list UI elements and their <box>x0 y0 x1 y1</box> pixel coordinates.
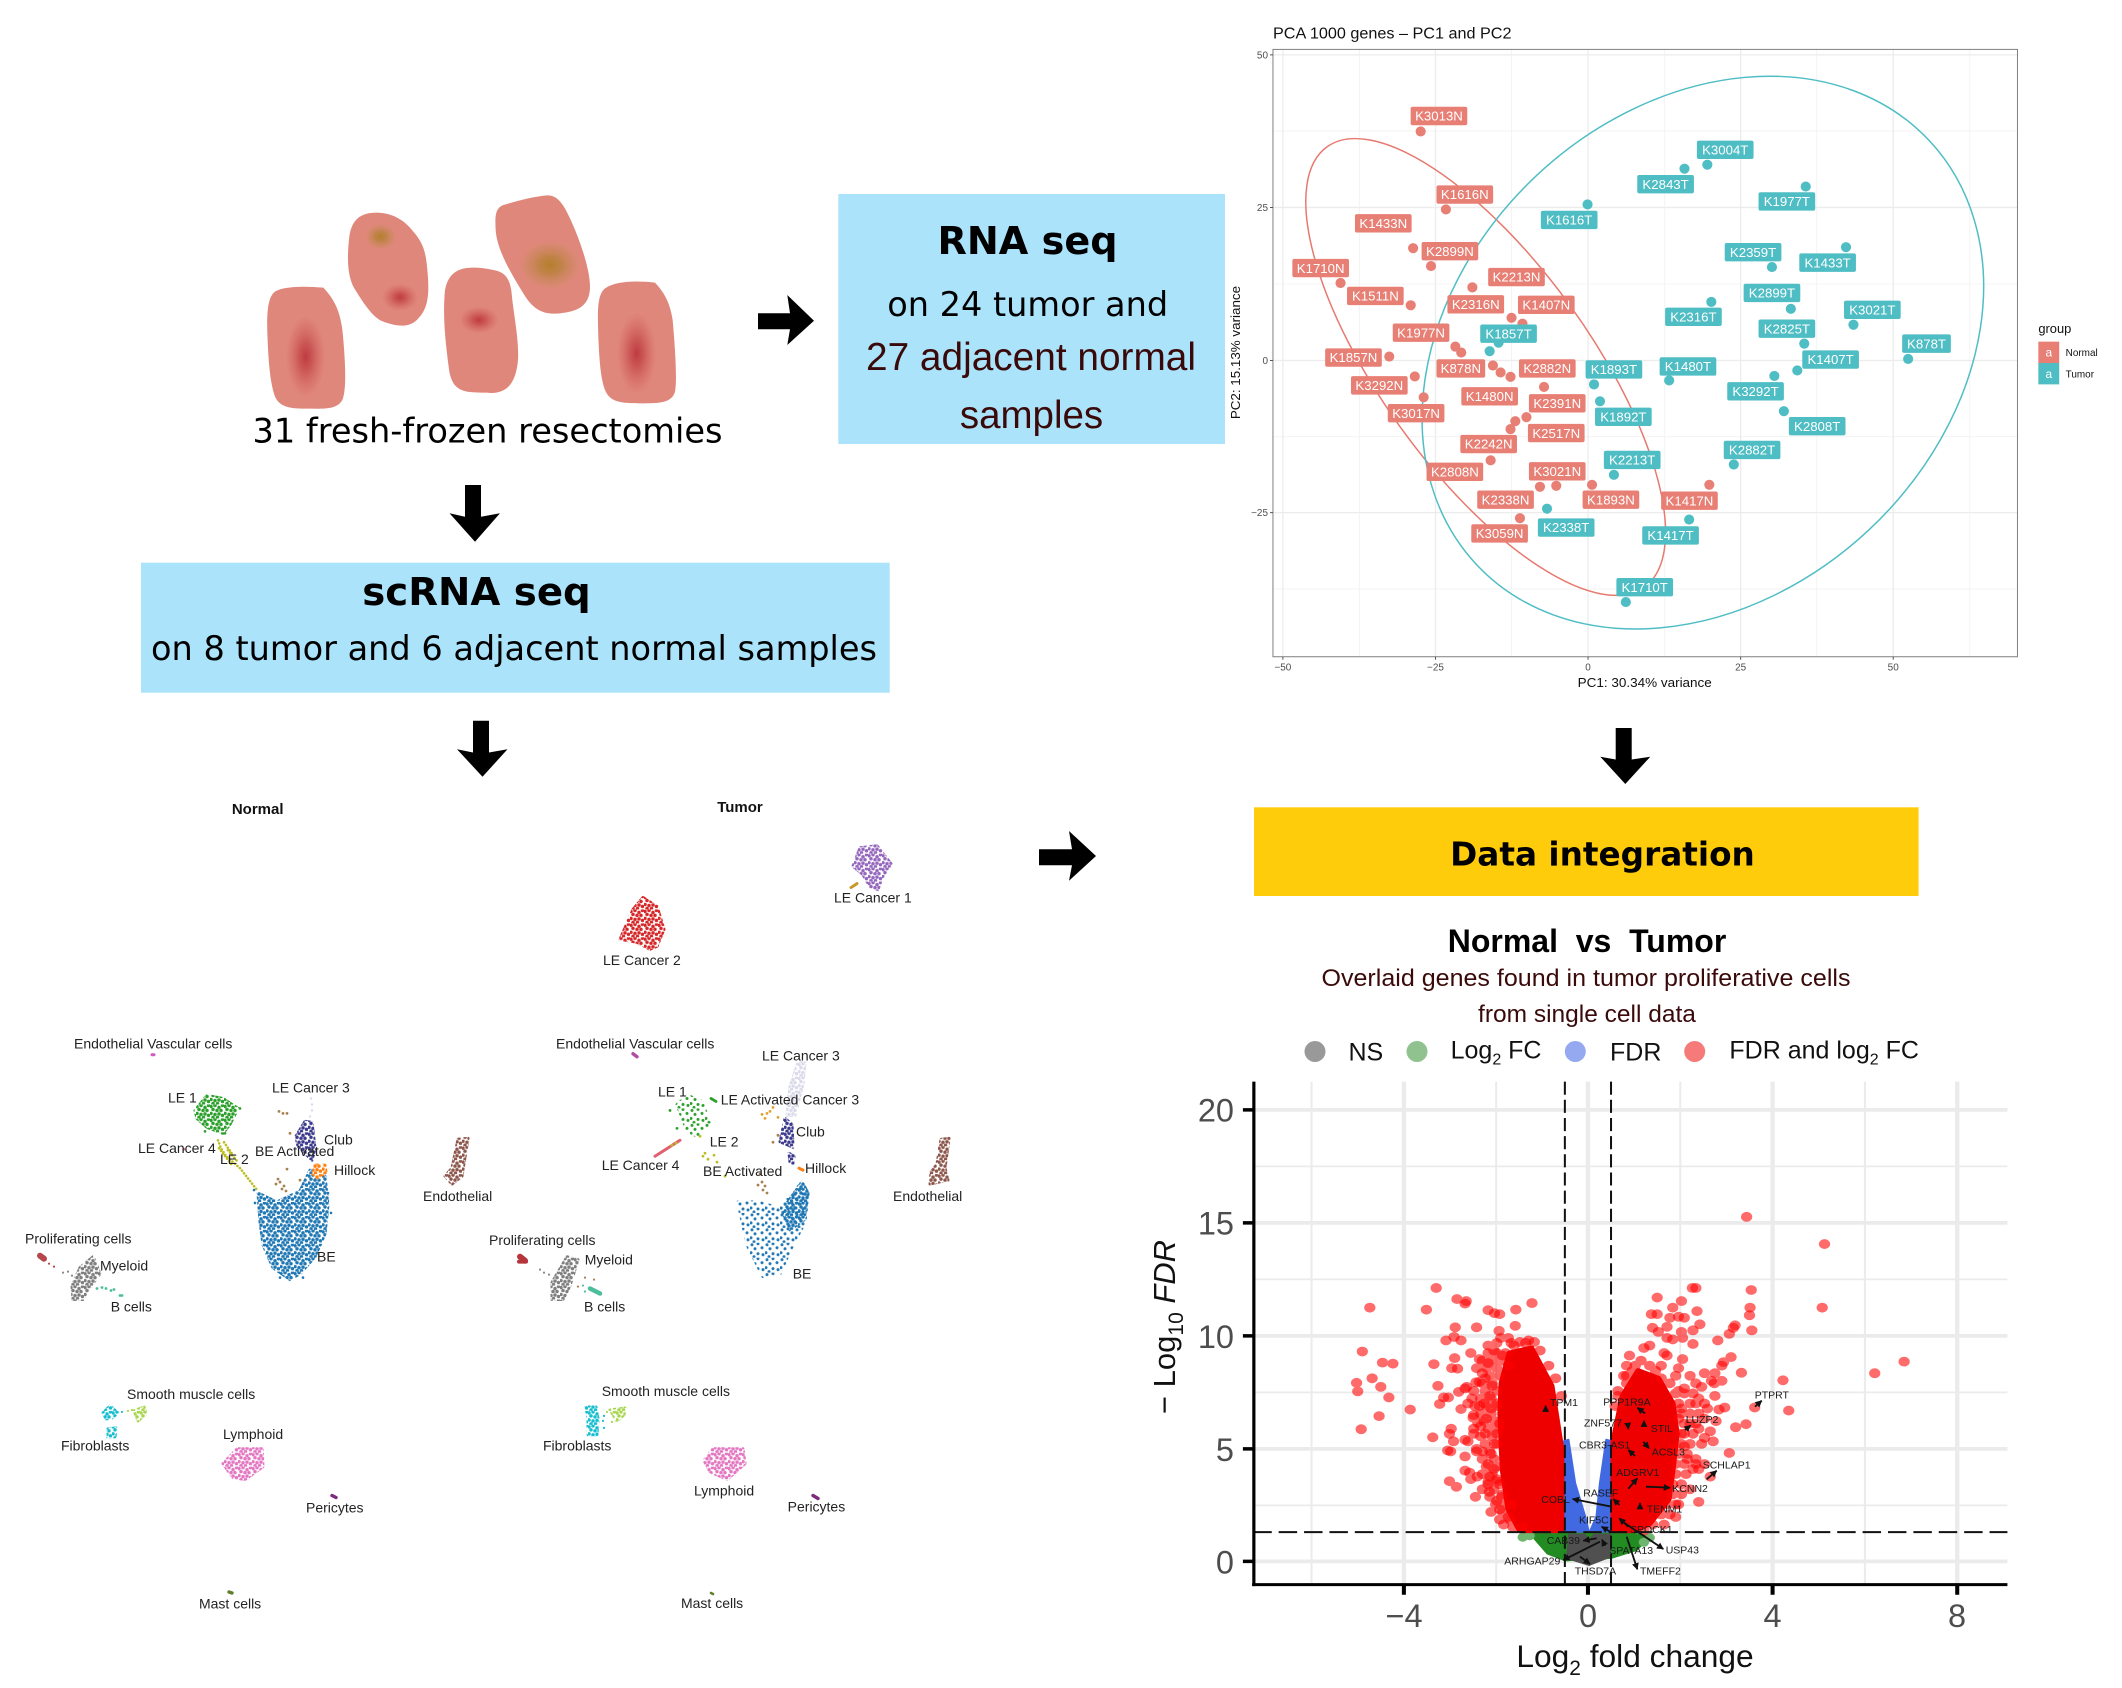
UMAP normal labels: Smooth muscle cells <box>127 1386 255 1402</box>
PCA normal sample labels: K1893N <box>1587 492 1635 507</box>
volcano red dense cloud <box>1500 1348 1677 1531</box>
PCA normal sample labels: K2882N <box>1523 361 1571 376</box>
PCA normal sample labels: K2338N <box>1482 492 1529 507</box>
volcano heading: from single cell data <box>1478 1001 1696 1028</box>
UMAP tumor labels: Mast cells <box>681 1595 743 1611</box>
UMAP normal labels: BE <box>317 1249 336 1265</box>
PCA normal sample labels: K3059N <box>1476 526 1523 541</box>
volcano green points <box>1534 1533 1647 1559</box>
UMAP tumor clusters <box>519 846 949 1594</box>
PCA tumor sample labels: K1407T <box>1807 352 1854 367</box>
PCA normal sample labels: K2808N <box>1431 465 1479 480</box>
PCA tumor sample labels: K2338T <box>1543 520 1589 535</box>
PCA tumor sample labels: K2882T <box>1729 443 1775 458</box>
PCA tick labels: 0 <box>1585 663 1591 674</box>
arrow: UMAP to data integration <box>1039 831 1096 881</box>
PCA tumor sample labels: K1480T <box>1665 359 1711 374</box>
PCA axis labels <box>1228 286 1712 690</box>
volcano scattered red points <box>1357 1217 1904 1525</box>
volcano gene labels: TPM1 <box>1550 1397 1578 1409</box>
PCA tumor sample labels: K3292T <box>1732 384 1779 399</box>
PCA tumor sample labels: K1893T <box>1591 362 1637 377</box>
UMAP tumor labels: LE 2 <box>710 1133 739 1149</box>
UMAP tumor labels: Proliferating cells <box>489 1232 596 1248</box>
PCA tumor sample labels: K3021T <box>1849 303 1896 318</box>
PCA tumor sample labels: K1417T <box>1647 528 1694 543</box>
volcano gene labels: SPATA13 <box>1609 1545 1653 1557</box>
PCA tick labels: −25 <box>1427 663 1444 674</box>
PCA normal sample labels: K878N <box>1441 361 1481 376</box>
PCA tumor sample labels: K1857T <box>1485 326 1532 341</box>
volcano legend: FC <box>1879 1037 1919 1065</box>
volcano gene labels: ARHGAP29 <box>1504 1556 1560 1568</box>
PCA normal sample labels: K1480N <box>1466 389 1514 404</box>
volcano threshold lines <box>1565 1082 1611 1585</box>
volcano axes <box>1243 1082 2007 1595</box>
UMAP tumor labels <box>489 890 962 1611</box>
UMAP normal labels: Proliferating cells <box>25 1230 132 1246</box>
UMAP normal labels: Endothelial <box>423 1188 492 1204</box>
PCA tumor points <box>1485 160 1913 607</box>
panel: RNA seq: samples <box>960 394 1103 437</box>
panel: scRNA seq <box>141 563 890 693</box>
volcano axis titles: Log <box>1516 1638 1569 1674</box>
UMAP normal labels: LE 2 <box>220 1151 249 1167</box>
panel: RNA seq: 27 adjacent normal <box>866 336 1196 379</box>
volcano gene labels: CBR3-AS1 <box>1579 1440 1631 1452</box>
PCA legend: Tumor <box>2066 369 2095 380</box>
PCA ellipses <box>1242 0 2095 742</box>
PCA tumor sample labels: K1433T <box>1804 255 1851 270</box>
UMAP tumor labels: Hillock <box>805 1160 846 1176</box>
volcano heading: Normal vs Tumor <box>1448 923 1726 959</box>
UMAP normal labels: BE Activated <box>255 1143 334 1159</box>
PCA normal sample labels: K2316N <box>1452 297 1500 312</box>
PCA tumor sample labels: K1892T <box>1600 409 1647 424</box>
PCA tumor sample labels: K878T <box>1907 336 1946 351</box>
PCA tick labels: 0 <box>1262 356 1268 367</box>
panel: UMAP tumor <box>489 799 962 1611</box>
volcano tick labels: 5 <box>1216 1432 1234 1468</box>
volcano legend: Log <box>1451 1037 1492 1065</box>
PCA title: PCA 1000 genes – PC1 and PC2 <box>1273 25 1512 42</box>
PCA normal sample labels: K1407N <box>1522 298 1570 313</box>
PCA legend <box>2038 321 2098 384</box>
UMAP tumor labels: Smooth muscle cells <box>602 1383 730 1399</box>
UMAP normal labels: LE Cancer 4 <box>138 1140 216 1156</box>
PCA normal sample labels <box>1292 107 1718 543</box>
PCA tick labels: 25 <box>1735 663 1747 674</box>
PCA normal sample labels: K1417N <box>1666 493 1713 508</box>
panel: scRNA seq: scRNA seq <box>362 570 591 615</box>
PCA grid <box>1270 49 2017 660</box>
volcano axis titles: fold change <box>1581 1638 1754 1674</box>
PCA tumor sample labels: K2213T <box>1609 453 1655 468</box>
UMAP normal labels: Myeloid <box>100 1258 148 1274</box>
volcano gene arrows <box>1546 1401 1762 1569</box>
PCA tumor sample labels: K1710T <box>1622 580 1668 595</box>
volcano gene labels: TENM1 <box>1647 1504 1682 1516</box>
volcano blue points <box>1564 1440 1612 1532</box>
volcano legend: 2 <box>1870 1052 1879 1069</box>
PCA legend: a <box>2045 346 2052 360</box>
arrow: resectomies to RNA seq <box>758 295 814 345</box>
UMAP tumor labels: LE Cancer 4 <box>602 1157 680 1173</box>
UMAP normal labels <box>25 1036 492 1611</box>
PCA tumor sample labels: K1977T <box>1764 194 1810 209</box>
PCA tumor sample labels: K2825T <box>1764 321 1810 336</box>
PCA tumor sample labels <box>1480 141 1951 596</box>
PCA normal sample labels: K2517N <box>1532 426 1580 441</box>
volcano axis titles <box>1147 1240 1754 1680</box>
UMAP normal labels: Endothelial Vascular cells <box>74 1036 232 1052</box>
PCA tumor sample labels: K2316T <box>1670 309 1717 324</box>
UMAP normal labels: Hillock <box>334 1162 375 1178</box>
PCA normal sample labels: K2391N <box>1533 396 1581 411</box>
PCA tumor sample labels: K2899T <box>1749 286 1795 301</box>
panel: RNA seq: on 24 tumor and <box>887 285 1168 324</box>
volcano gene labels: COBL <box>1541 1494 1570 1506</box>
PCA legend: a <box>2045 367 2052 381</box>
volcano gene labels: USP43 <box>1666 1544 1699 1556</box>
panel: volcano plot <box>1147 923 2007 1680</box>
volcano gene labels: ACSL3 <box>1652 1447 1685 1459</box>
UMAP tumor labels: LE Cancer 3 <box>762 1048 840 1064</box>
arrow: resectomies to scRNA seq <box>450 485 500 542</box>
volcano gene labels: SCHLAP1 <box>1703 1459 1751 1471</box>
UMAP tumor labels: BE Activated <box>703 1163 782 1179</box>
PCA normal points <box>1335 126 1714 523</box>
PCA tick labels: 50 <box>1888 663 1899 674</box>
UMAP tumor labels: LE Cancer 1 <box>834 890 912 905</box>
UMAP normal title: Normal <box>232 801 284 818</box>
PCA tumor sample labels: K1616T <box>1546 213 1592 228</box>
UMAP tumor labels: B cells <box>584 1298 625 1314</box>
PCA tumor sample labels: K2843T <box>1642 177 1689 192</box>
UMAP normal clusters <box>40 1055 468 1593</box>
PCA tick labels: −50 <box>1274 663 1292 674</box>
volcano gene labels: LUZP2 <box>1686 1414 1719 1426</box>
volcano legend <box>1304 1037 1919 1069</box>
UMAP tumor labels: Pericytes <box>788 1498 845 1514</box>
UMAP tumor labels: Endothelial <box>893 1188 962 1204</box>
volcano axis titles: 2 <box>1569 1657 1581 1680</box>
PCA tumor sample labels: K2808T <box>1794 419 1840 434</box>
UMAP tumor labels: LE Activated Cancer 3 <box>721 1092 859 1107</box>
UMAP normal labels: Lymphoid <box>223 1426 283 1442</box>
PCA normal sample labels: K2899N <box>1426 244 1474 259</box>
panel: scRNA seq: on 8 tumor and 6 adjacent normal samples <box>151 629 877 669</box>
volcano green outliers <box>1523 1536 1650 1542</box>
PCA legend: Normal <box>2066 348 2098 359</box>
panel: UMAP normal <box>25 801 492 1611</box>
volcano gene labels: STIL <box>1651 1423 1673 1435</box>
PCA normal sample labels: K1511N <box>1352 289 1399 304</box>
PCA normal sample labels: K3013N <box>1415 109 1463 124</box>
volcano plot area <box>1243 1082 2007 1595</box>
panel: PCA plot <box>1228 0 2098 742</box>
PCA normal sample labels: K1857N <box>1330 350 1377 365</box>
PCA axis labels: PC1: 30.34% variance <box>1578 675 1712 690</box>
PCA axis labels: PC2: 15.13% variance <box>1228 286 1243 419</box>
PCA normal sample labels: K2213N <box>1493 270 1540 285</box>
panel: RNA seq: RNA seq <box>938 219 1118 263</box>
UMAP tumor labels: Lymphoid <box>694 1483 754 1498</box>
UMAP normal labels: Club <box>324 1131 353 1147</box>
volcano gene labels: RASEF <box>1583 1487 1618 1499</box>
volcano tick labels: 0 <box>1579 1598 1597 1634</box>
volcano tick labels: 15 <box>1198 1206 1234 1242</box>
PCA tick labels: 50 <box>1257 50 1268 61</box>
PCA tick labels: 25 <box>1257 203 1268 214</box>
UMAP tumor labels: LE Cancer 2 <box>603 952 681 968</box>
PCA normal sample labels: K3021N <box>1533 464 1581 479</box>
volcano axis titles: 10 <box>1165 1312 1188 1336</box>
volcano tick labels: −4 <box>1385 1598 1423 1634</box>
volcano tick labels: 8 <box>1948 1598 1966 1634</box>
UMAP tumor labels: BE <box>793 1266 811 1282</box>
PCA normal sample labels: K2242N <box>1465 437 1513 452</box>
PCA tick labels: −25 <box>1251 508 1268 519</box>
volcano tick labels: 4 <box>1764 1598 1782 1634</box>
volcano legend: 2 <box>1492 1052 1501 1069</box>
volcano legend: FC <box>1501 1037 1542 1065</box>
volcano legend: NS <box>1348 1039 1383 1067</box>
caption: resectomies: 31 fresh-frozen resectomies <box>252 412 722 452</box>
UMAP normal labels: B cells <box>111 1298 152 1314</box>
PCA tumor sample labels: K2359T <box>1730 245 1776 260</box>
volcano gene labels: KIF5C <box>1579 1515 1609 1527</box>
UMAP tumor labels: Myeloid <box>585 1252 633 1268</box>
volcano gene labels: THSD7A <box>1575 1565 1616 1577</box>
volcano tick labels: 0 <box>1216 1545 1234 1581</box>
volcano tick labels: 20 <box>1198 1093 1234 1129</box>
PCA normal sample labels: K1433N <box>1359 216 1407 231</box>
PCA normal sample labels: K1710N <box>1297 261 1345 276</box>
panel: data integration: Data integration <box>1450 834 1755 873</box>
UMAP normal labels: Pericytes <box>306 1499 364 1515</box>
PCA tumor sample labels: K3004T <box>1702 142 1748 157</box>
UMAP tumor labels: LE 1 <box>658 1084 687 1100</box>
UMAP normal labels: LE Cancer 3 <box>272 1080 350 1096</box>
UMAP normal labels: Fibroblasts <box>61 1438 129 1454</box>
UMAP tumor title: Tumor <box>717 799 763 816</box>
UMAP tumor labels: Fibroblasts <box>543 1438 611 1454</box>
icon: tissue resections <box>267 195 676 409</box>
UMAP tumor labels: Club <box>796 1123 825 1139</box>
UMAP tumor labels: Endothelial Vascular cells <box>556 1036 714 1052</box>
volcano grey points <box>1566 1534 1611 1566</box>
PCA normal sample labels: K3017N <box>1392 406 1440 421</box>
PCA tick labels <box>1251 50 1899 674</box>
volcano axis titles: FDR <box>1147 1240 1182 1312</box>
volcano heading: Overlaid genes found in tumor proliferative cells <box>1322 965 1850 992</box>
PCA normal sample labels: K3292N <box>1355 378 1403 393</box>
volcano gene labels: PTPRT <box>1755 1390 1790 1402</box>
volcano gene labels: SPOCK1 <box>1630 1524 1673 1536</box>
panel: data integration <box>1254 807 1919 896</box>
volcano legend: FDR and log <box>1729 1037 1870 1065</box>
volcano tick labels: 10 <box>1198 1319 1234 1355</box>
volcano axis titles: − Log <box>1147 1336 1182 1414</box>
volcano heading <box>1322 923 1850 1028</box>
arrow: scRNA seq to UMAP <box>457 721 508 777</box>
volcano gene labels: ADGRV1 <box>1616 1467 1659 1479</box>
volcano legend: FDR <box>1610 1039 1661 1067</box>
volcano gene labels: PPP1R9A <box>1603 1397 1651 1409</box>
UMAP normal labels: Mast cells <box>199 1595 261 1611</box>
volcano gene labels: ZNF577 <box>1584 1418 1622 1430</box>
UMAP normal labels: LE 1 <box>168 1090 197 1105</box>
volcano gene labels: KCNN2 <box>1672 1483 1708 1495</box>
volcano gene labels <box>1504 1390 1790 1577</box>
panel: RNA seq <box>838 194 1225 444</box>
PCA normal sample labels: K1977N <box>1397 325 1445 340</box>
arrow: PCA to data integration <box>1600 728 1650 784</box>
PCA normal sample labels: K1616N <box>1441 187 1489 202</box>
volcano tick labels <box>1198 1093 1966 1634</box>
volcano gene labels: CAB39 <box>1547 1535 1580 1547</box>
volcano gene labels: TMEFF2 <box>1640 1565 1681 1577</box>
PCA legend: group <box>2038 321 2071 336</box>
